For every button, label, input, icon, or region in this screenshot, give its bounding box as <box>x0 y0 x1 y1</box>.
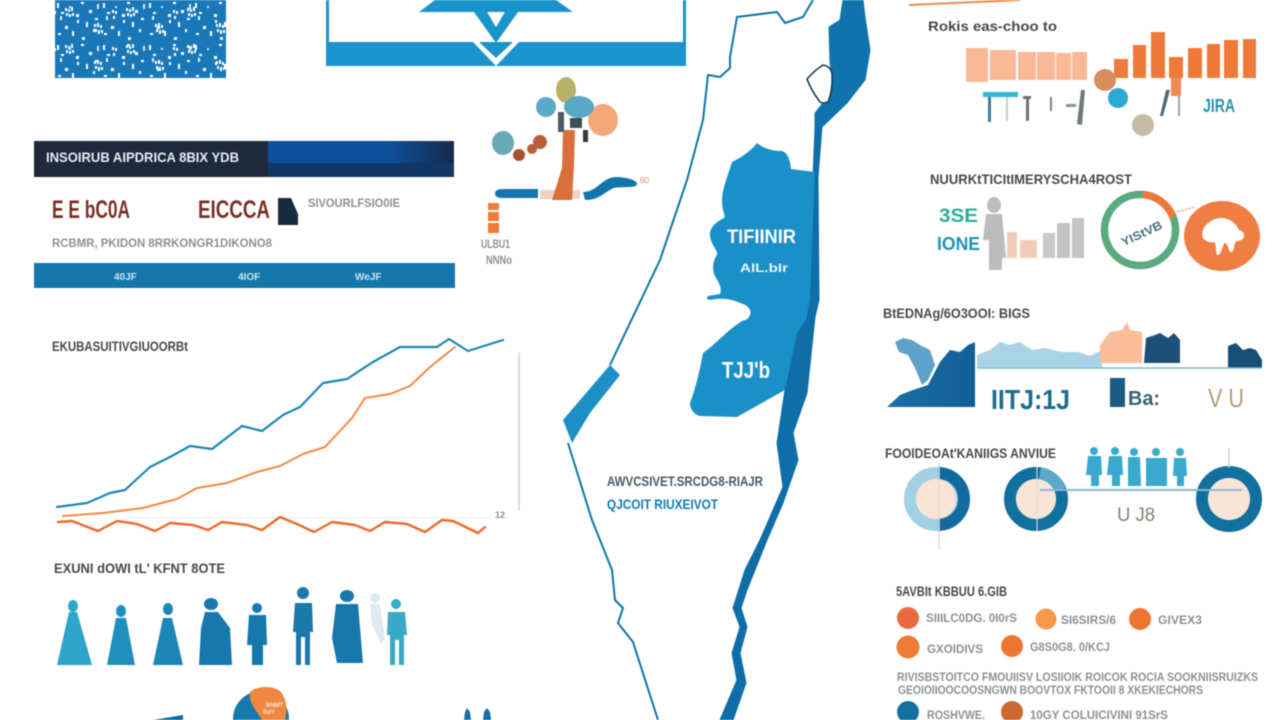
icon: person 1 <box>57 600 92 665</box>
map: gaza <box>563 365 620 443</box>
labels: IITJ:1J <box>991 384 1070 415</box>
bottom pie chart <box>233 687 289 720</box>
small orange stack with label: NNNo <box>486 253 512 267</box>
legend item 3: GIVEX3 <box>1158 613 1202 627</box>
header bar: INSOIRUB AIPDRICA 8BIX YDB <box>46 149 239 165</box>
icon: dark silhouette <box>278 198 298 225</box>
legend item 4 <box>896 636 983 658</box>
footer bar: 40JF <box>114 272 137 283</box>
legend item 1: SIIILC0DG. 0I0rS <box>926 611 1017 625</box>
grey bars <box>1007 218 1084 258</box>
heading: legend: 5AVBIt KBBUU 6.GIB <box>896 583 1007 599</box>
bar chart panel <box>966 32 1256 136</box>
icon: person 8 <box>387 599 407 665</box>
stat label: SIVOURLFSIO0IE <box>308 196 400 210</box>
heading: line chart: EKUBASUITIVGIUOORBt <box>52 338 188 354</box>
bottom people fragment <box>464 708 491 720</box>
icon: tree diagram <box>492 77 650 200</box>
people: dark <box>1144 333 1180 363</box>
text block: GEOIOIIOOCOOSNGWN BOOVTOX FKTOOII 8 XKEKIECHORS <box>898 683 1203 697</box>
donut 3 <box>1202 448 1256 526</box>
icon: person 5 <box>247 603 267 665</box>
area: peach <box>1100 322 1142 363</box>
legend <box>896 607 1202 658</box>
donut 2 <box>1010 467 1062 531</box>
map outline <box>568 0 813 720</box>
stat figure two: EICCCA <box>198 196 270 224</box>
map: west bank: TJJ'b <box>722 357 770 383</box>
bottom pie chart: BNMT <box>266 703 284 709</box>
icon: person 3 <box>153 603 183 665</box>
heading: people: EXUNI dOWI tL' KFNT 8OTE <box>54 560 225 576</box>
texture panel <box>55 0 226 78</box>
donut 1 <box>910 463 964 550</box>
panel: person and donut: IONE <box>937 234 980 254</box>
icon: orange cloud <box>1184 201 1260 271</box>
connector <box>1040 489 1242 491</box>
donut chart: YIStVB <box>1119 218 1165 249</box>
legend item 2: SI6SIRS/6 <box>1061 613 1116 627</box>
small orange stack with label <box>481 203 512 267</box>
bottom legend <box>897 701 1168 720</box>
icon: star of david fragment <box>419 0 573 66</box>
posts <box>983 78 1181 125</box>
landscape chart: Ba: <box>1128 388 1160 410</box>
people icons row <box>57 587 407 665</box>
bottom wedge <box>153 715 183 720</box>
landscape chart: V U <box>1208 383 1244 413</box>
icon: person 6 <box>293 587 313 665</box>
legend item: brown <box>1001 701 1168 720</box>
header bar <box>34 141 454 177</box>
map caption: AWVCSIVET.SRCDG8-RIAJR <box>607 473 763 489</box>
teal label: JIRA <box>1203 96 1235 116</box>
heading: bars: Rokis eas-choo to <box>928 18 1057 34</box>
area: scattered splash <box>895 338 935 385</box>
heading: donuts: FOOIDEOAt'KANIIGS ANVIUE <box>885 445 1056 461</box>
footer bar: WeJF <box>355 272 382 283</box>
people group <box>1086 447 1187 486</box>
bottom pie chart: RdY <box>263 710 275 716</box>
landscape chart <box>887 322 1262 415</box>
icon: ghost person <box>370 593 385 643</box>
area: dark <box>887 342 975 407</box>
heading: donut section: NUURKtTICItIMERYSCHA4ROST <box>930 171 1132 187</box>
map: west bank: TIFIINIR <box>727 227 796 248</box>
icon: person 2 <box>107 605 135 665</box>
legend item 3 <box>1129 608 1202 630</box>
area: right skyline <box>1228 343 1262 368</box>
map <box>563 0 870 720</box>
map: northern lake region <box>807 0 870 128</box>
legend item 2 <box>1036 608 1116 630</box>
baseline <box>977 367 1262 369</box>
legend item 5 <box>1001 635 1110 657</box>
panel: statistics header <box>34 141 455 288</box>
icon: person 4 <box>199 598 232 665</box>
line chart <box>57 339 519 533</box>
heading: landscape: BtEDNAg/6O3OOI: BIGS <box>883 305 1030 321</box>
legend item 1 <box>897 607 1017 629</box>
stat figure one: E E bC0A <box>52 196 130 224</box>
panel: three donuts <box>910 447 1256 550</box>
icon: grey person <box>983 197 1006 270</box>
legend item: blue <box>897 701 985 720</box>
icon: tree diagram: 60 <box>640 176 650 185</box>
donut chart <box>1104 194 1176 266</box>
dark bars <box>1114 32 1256 78</box>
footer bar <box>34 263 455 288</box>
label: U J8 <box>1117 505 1155 526</box>
top accent line <box>909 0 1020 5</box>
blobs <box>1094 69 1116 91</box>
stat labels: 3SE <box>939 206 978 227</box>
legend item 5: G8S0G8. 0/KCJ <box>1030 640 1110 654</box>
flag <box>326 0 686 66</box>
panel: person and donut <box>937 194 1260 271</box>
line chart: 12 <box>495 510 505 520</box>
map: west bank: AIL.bIr <box>740 261 788 275</box>
map: west bank <box>690 143 817 417</box>
map: river <box>720 127 822 720</box>
connector <box>1176 207 1195 212</box>
map caption: QJCOIT RIUXEIVOT <box>607 496 718 512</box>
light bars <box>966 48 1087 82</box>
text block <box>897 670 1258 697</box>
small orange stack with label: ULBU1 <box>481 237 510 251</box>
area: light skyline <box>977 342 1102 368</box>
stat description: RCBMR, PKIDON 8RRKONGR1DIKONO8 <box>52 236 272 250</box>
footer bar: 4IOF <box>238 272 260 283</box>
map caption <box>607 473 763 512</box>
legend item 4: GXOIDIVS <box>927 642 983 656</box>
icon: person 7 <box>332 590 363 663</box>
